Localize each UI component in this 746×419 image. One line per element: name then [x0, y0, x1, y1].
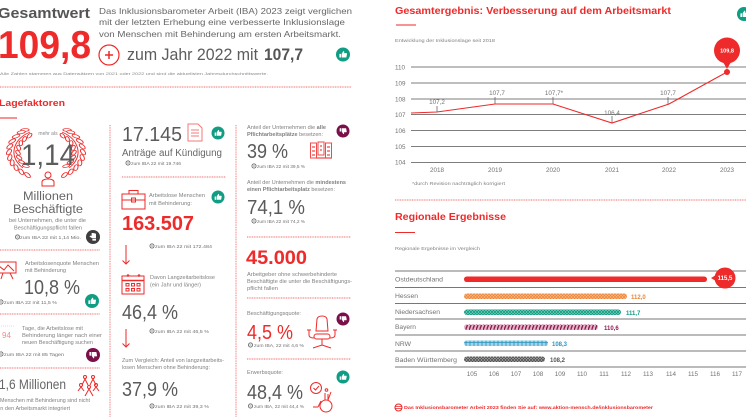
- panel: 1,14 Millionen Beschäftigte: [2, 121, 100, 244]
- callout: 109,8: [714, 38, 740, 75]
- bar chart: regional results: Niedersachsen: [395, 309, 441, 316]
- bar: Niedersachsen: 111,7: [626, 311, 641, 317]
- bar chart: regional results: 110: [577, 371, 588, 378]
- panel: Langzeitarbeitslose: (ein Jahr und länger): [150, 282, 201, 288]
- heading: Regionale Ergebnisse: [395, 211, 506, 232]
- panel: Arbeitslosenquote: 10,8 %: [24, 276, 80, 299]
- panel: Tage der Arbeitslosigkeit: [0, 326, 102, 362]
- chart subtitle: Regionale Ergebnisse im Vergleich: [395, 246, 481, 251]
- bar chart: regional results: 113: [643, 371, 654, 378]
- panel: Arbeitslose Menschen: Arbeitslose Menschen: [149, 193, 205, 199]
- panel: Erwerbsquote: Erwerbsquote:: [247, 370, 283, 376]
- icon: document: [188, 124, 202, 141]
- panel: 45.000 Arbeitgeber: [246, 247, 352, 292]
- icon: plus circle: [99, 45, 119, 65]
- icon: chart: [0, 262, 16, 279]
- panel: Pflichtarbeitsplätze: Anteil der Unternehmen die mindestens: [247, 180, 346, 186]
- panel: 1,6 Millionen: in den Arbeitsmarkt integriert: [0, 406, 71, 412]
- bar chart: regional results: 117: [732, 371, 743, 378]
- line chart: Inklusionslage 2018–2023: 107,7: [660, 90, 676, 97]
- icon: thumb down: [336, 312, 350, 326]
- line chart: Inklusionslage 2018–2023: 2021: [605, 167, 619, 174]
- line chart: Inklusionslage 2018–2023: 2022: [662, 167, 676, 174]
- line chart: Inklusionslage 2018–2023: 2019: [488, 167, 502, 174]
- bar chart: regional results: 114: [666, 371, 677, 378]
- arrow: down: [122, 245, 130, 264]
- line chart: Inklusionslage 2018–2023: [395, 38, 746, 174]
- panel: 1,14 Millionen Beschäftigte: Beschäftigte: [13, 204, 83, 216]
- panel: Anträge auf Kündigung: Anträge auf Kündigung: [122, 148, 222, 159]
- bar chart: regional results: Bayern: [395, 324, 417, 331]
- line chart: Inklusionslage 2018–2023: 105: [395, 144, 406, 151]
- bar chart: regional results: 107: [511, 371, 522, 378]
- panel: Langzeitarbeitslose: Davon Langzeitarbeitslose: [150, 275, 215, 281]
- icon: calendar: [122, 275, 144, 294]
- heading: Gesamtergebnis: Gesamtergebnis: Verbesserung auf dem Arbeitsmarkt: [395, 5, 672, 17]
- panel: 1,14 Millionen Beschäftigte: bei Unternehmen, die unter die: [9, 218, 86, 224]
- heading: Lagefaktoren: Lagefaktoren: [0, 98, 65, 109]
- panel: Langzeitarbeitslose: zum IBA 22 mit 46,5 %: [155, 329, 210, 335]
- panel: Beschäftigungsquote: Beschäftigungsquote:: [247, 311, 301, 317]
- bar: Baden Württemberg: 108,2: [550, 358, 566, 364]
- panel: Arbeitslosenquote: zum IBA 22 mit 11,5 %: [4, 300, 58, 306]
- panel: Pflichtarbeitsplätze: Anteil der Unternehmen die alle: [247, 125, 326, 131]
- intro text: mit der letzten Erhebung eine verbesserte Inklusionslage: [99, 17, 345, 27]
- bar chart: regional results: [395, 268, 746, 378]
- panel: Arbeitslose Menschen: mit Behinderung:: [149, 201, 192, 207]
- icon: check and wheelchair: [310, 382, 332, 412]
- bar chart: regional results: 116: [710, 371, 721, 378]
- bar chart: regional results: 106: [489, 371, 500, 378]
- panel: 1,6 Millionen: Menschen mit Behinderung sind nicht: [0, 398, 91, 404]
- comparison to 2022: 107,7: [264, 45, 303, 64]
- line chart: Inklusionslage 2018–2023: 107: [395, 112, 406, 119]
- bar chart: regional results: Hessen: [395, 293, 419, 300]
- intro text: von Menschen mit Behinderung am ersten Arbeitsmarkt.: [99, 29, 341, 39]
- data line: [411, 72, 727, 123]
- value: 94: 94: [2, 331, 11, 340]
- panel: Arbeitslosenquote: [0, 261, 99, 308]
- heading: Regionale Ergebnisse: Regionale Ergebnisse: [395, 211, 506, 223]
- panel: Langzeitarbeitslose: [122, 275, 224, 410]
- panel: Langzeitarbeitslose: Zum Vergleich: Anteil von langzeitarbeits-: [122, 358, 224, 364]
- panel: 1,6 Millionen: [0, 376, 99, 412]
- comparison to 2022: zum Jahr 2022 mit: [127, 45, 258, 64]
- icon: thumb up: [212, 190, 224, 204]
- line chart: Inklusionslage 2018–2023: 2018: [430, 167, 444, 174]
- panel: Tage der Arbeitslosigkeit: Tage, die Arbeitslose mit: [22, 326, 84, 332]
- panel: 1,14 Millionen Beschäftigte: Beschäftigungspflicht fallen: [14, 226, 82, 232]
- panel: Tage der Arbeitslosigkeit: zum IBA 22 mit 85 Tagen: [4, 352, 64, 358]
- panel: 45.000 Arbeitgeber: pflicht fallen: [247, 286, 278, 292]
- panel: Anträge auf Kündigung: 17.145: [122, 123, 182, 146]
- bar: Hessen: [464, 294, 646, 301]
- panel: Arbeitslose Menschen: [122, 190, 224, 264]
- icon: person: [42, 172, 54, 186]
- panel: 1,14 Millionen Beschäftigte: Millionen: [23, 191, 73, 203]
- heading: Lagefaktoren: [0, 98, 65, 118]
- panel: Erwerbsquote: 48,4 %: [247, 381, 303, 404]
- icon: link: [395, 404, 402, 411]
- icon: neutral thumb: [86, 230, 100, 244]
- bar: Ostdeutschland: 115,5: [718, 276, 733, 282]
- panel: 1,14 Millionen Beschäftigte: mehr als: [38, 131, 58, 137]
- icon: office chair: [307, 316, 337, 348]
- panel: Beschäftigungsquote: 4,5 %: [247, 321, 293, 344]
- bar: NRW: 108,3: [552, 342, 568, 348]
- panel: Langzeitarbeitslose: 37,9 %: [122, 378, 178, 401]
- headline number 109,8: 109,8: [0, 24, 91, 67]
- callout: 109,8: 109,8: [720, 48, 734, 54]
- bar: Niedersachsen: [464, 310, 641, 317]
- intro text: [99, 6, 352, 39]
- bar: Bayern: 110,6: [604, 326, 619, 332]
- panel: Pflichtarbeitsplätze: zum IBA 22 mit 39,5 %: [257, 164, 306, 170]
- data note: Alle Zahlen stammen aus Datensätzen von 2021 oder 2022 und sind die aktuellsten Jahresdurchschnittswerte.: [0, 71, 268, 76]
- panel: Arbeitslose Menschen: 163.507: [122, 213, 194, 235]
- line chart: Inklusionslage 2018–2023: 2020: [546, 167, 560, 174]
- panel: Arbeitslose Menschen: zum IBA 22 mit 172.484: [155, 244, 212, 250]
- panel: Tage der Arbeitslosigkeit: Behinderung länger nach einer: [22, 333, 102, 339]
- footnote: *durch Revision nachträglich korrigiert: [412, 181, 506, 186]
- bar: Bayern: [464, 324, 619, 332]
- panel: 45.000 Arbeitgeber: Arbeitgeber ohne schwerbehinderte: [247, 272, 337, 278]
- panel: Langzeitarbeitslose: 46,4 %: [122, 301, 178, 324]
- icon: thumb down: [86, 348, 100, 362]
- bar chart: regional results: 115: [688, 371, 699, 378]
- icon: thumb up: [85, 294, 99, 308]
- panel: Tage der Arbeitslosigkeit: neuen Beschäftigung suchen: [22, 340, 93, 346]
- chart subtitle: Entwicklung der Inklusionslage seit 2018: [395, 38, 496, 43]
- line chart: Inklusionslage 2018–2023: 107,7*: [545, 90, 564, 97]
- bar chart: regional results: 105: [467, 371, 478, 378]
- bar chart: regional results: 109: [555, 371, 566, 378]
- bar chart: regional results: 111: [599, 371, 609, 378]
- icon: thumb up: [212, 126, 224, 140]
- panel: 1,14 Millionen Beschäftigte: zum IBA 22 mit 1,14 Mio.: [20, 235, 81, 241]
- line chart: Inklusionslage 2018–2023: 106,4: [604, 110, 620, 117]
- panel: Pflichtarbeitsplätze: zum IBA 22 mit 74,2 %: [257, 219, 306, 225]
- panel: Pflichtarbeitsplätze: 74,1 %: [247, 196, 305, 219]
- icon: laurel wreath: [2, 121, 90, 183]
- line chart: Inklusionslage 2018–2023: 109: [395, 80, 406, 88]
- panel: Langzeitarbeitslose: losen Menschen ohne Behinderung:: [122, 365, 210, 371]
- icon: thumb up: [336, 370, 350, 384]
- panel: Erwerbsquote: zum IBA, 22 mit 44,4 %: [254, 404, 305, 410]
- panel: 45.000 Arbeitgeber: 45.000: [246, 247, 307, 269]
- bar: Ostdeutschland: [464, 268, 736, 288]
- bar chart: regional results: Ostdeutschland: [395, 276, 444, 284]
- line chart: Inklusionslage 2018–2023: 107,7: [489, 90, 505, 97]
- panel: 1,6 Millionen: 1,6 Millionen: [0, 377, 66, 392]
- bar: Baden Württemberg: [464, 356, 566, 364]
- line chart: Inklusionslage 2018–2023: 108: [395, 96, 406, 104]
- panel: 45.000 Arbeitgeber: Beschäftigte die unter die Beschäftigungs-: [247, 279, 352, 285]
- bar: Hessen: 112,0: [631, 295, 646, 301]
- line chart: Inklusionslage 2018–2023: 107,2: [429, 99, 445, 106]
- panel: Beschäftigungsquote: [247, 311, 350, 349]
- panel: Anträge auf Kündigung: [122, 123, 224, 167]
- line chart: Inklusionslage 2018–2023: 104: [395, 160, 406, 166]
- heading: Gesamtwert: Gesamtwert: [0, 5, 90, 22]
- panel: Langzeitarbeitslose: zum IBA 22 mit 39,3 %: [155, 404, 210, 410]
- icon: thumb down: [336, 124, 350, 138]
- footer link: [395, 404, 653, 411]
- bar chart: regional results: NRW: [395, 341, 411, 348]
- panel: Erwerbsquote: [247, 370, 350, 412]
- icon: people: [78, 376, 99, 396]
- panel: Anträge auf Kündigung: zum IBA 22 mit 19.746: [131, 161, 181, 167]
- line chart: Inklusionslage 2018–2023: 110: [395, 64, 406, 72]
- intro text: Das Inklusionsbarometer Arbeit (IBA) 2023 zeigt verglichen: [99, 6, 352, 16]
- footer link: Das Inklusionsbarometer Arbeit 2023 finden Sie auf: www.aktion-mensch.de/inklusionsbarometer: [404, 405, 653, 411]
- panel: Pflichtarbeitsplätze: einen Pflichtarbeitsplatz besetzen:: [247, 187, 335, 193]
- panel: 1,14 Millionen Beschäftigte: 1,14: [21, 139, 75, 172]
- bar: NRW: [464, 340, 568, 348]
- panel: Pflichtarbeitsplätze: 39 %: [247, 140, 288, 163]
- line chart: Inklusionslage 2018–2023: 2023: [720, 167, 734, 174]
- panel: Arbeitslosenquote: Arbeitslosenquote Menschen: [25, 261, 99, 267]
- panel: Arbeitslosenquote: mit Behinderung: [25, 268, 66, 274]
- bar chart: regional results: Baden Württemberg: [395, 357, 458, 364]
- icon: buildings: [310, 142, 332, 158]
- panel: Beschäftigungsquote: zum IBA, 22 mit 4,6 %: [254, 343, 305, 349]
- icon: briefcase: [122, 190, 145, 209]
- icon: thumb up: [336, 48, 350, 62]
- icon: thumb up: [737, 7, 746, 21]
- panel: Pflichtarbeitsplätze: Pflichtarbeitsplätze besetzen:: [247, 132, 323, 138]
- line chart: Inklusionslage 2018–2023: 106: [395, 128, 406, 135]
- panel: Pflichtarbeitsplätze: [247, 124, 350, 225]
- bar chart: regional results: 108: [533, 371, 544, 378]
- bar chart: regional results: 112: [621, 371, 632, 378]
- arrow: down: [122, 329, 130, 347]
